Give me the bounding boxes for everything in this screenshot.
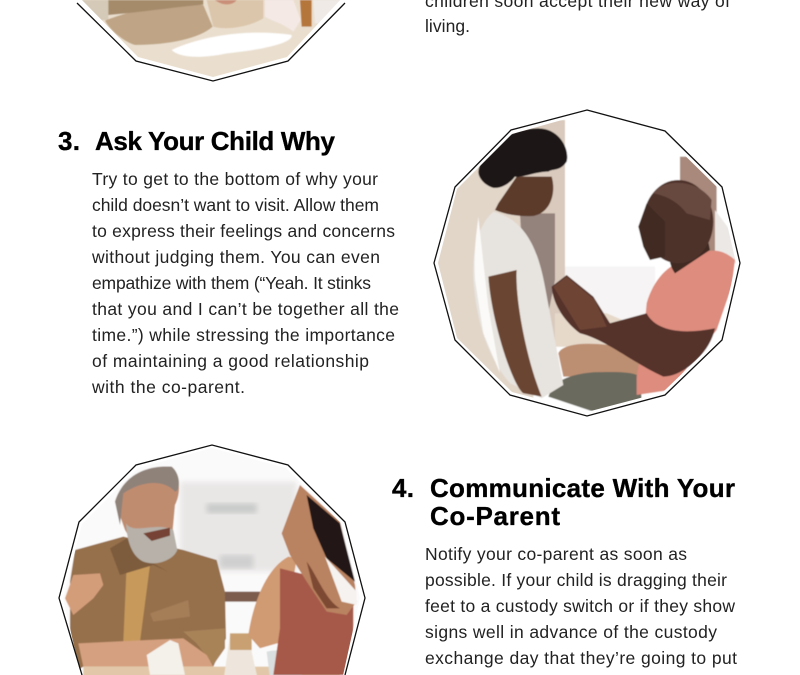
heading: step 4: Communicate With Your xyxy=(430,473,735,503)
text block: step 3 body: time.”) while stressing the importance xyxy=(92,325,395,345)
photo: father talking to child xyxy=(433,109,741,417)
decagon frame: family photo xyxy=(77,3,345,81)
photo: family relaxing on the floor (bottom of image) xyxy=(76,0,346,82)
text block: step 4 body: Notify your co-parent as soon as xyxy=(425,544,687,564)
heading: step 4: 4. xyxy=(392,473,414,503)
text block: step 3 body: to express their feelings and concerns xyxy=(92,221,395,241)
text block: step 3 body: without judging them. You can even xyxy=(91,247,380,267)
photo: co-parents talking at table xyxy=(58,444,366,675)
step 2 closing text xyxy=(425,0,730,36)
step 2 closing text: living. xyxy=(425,16,470,36)
text block: step 3 body xyxy=(91,169,399,397)
polygon frame: co-parents photo xyxy=(59,445,365,675)
dodecagon frame: father and child xyxy=(434,110,740,416)
heading: step 3: 3. xyxy=(58,126,80,156)
text block: step 3 body: Try to get to the bottom of why your xyxy=(92,169,378,189)
heading: step 3: Ask Your Child Why xyxy=(95,126,336,156)
text block: step 4 body: feet to a custody switch or if they show xyxy=(425,596,735,616)
text block: step 4 body: exchange day that they’re going to put xyxy=(425,648,737,668)
text block: step 3 body: empathize with them (“Yeah. It stinks xyxy=(92,273,371,293)
text block: step 4 body xyxy=(425,544,737,668)
text block: step 4 body: possible. If your child is dragging their xyxy=(425,570,727,590)
text block: step 3 body: child doesn’t want to visit. Allow them xyxy=(92,195,379,215)
heading: step 4 xyxy=(392,473,735,531)
text block: step 3 body: of maintaining a good relationship xyxy=(92,351,369,371)
text block: step 3 body: with the co-parent. xyxy=(91,377,245,397)
text block: step 4 body: signs well in advance of the custody xyxy=(425,622,717,642)
text block: step 3 body: that you and I can’t be together all the xyxy=(92,299,399,319)
heading: step 4: Co-Parent xyxy=(430,501,560,531)
